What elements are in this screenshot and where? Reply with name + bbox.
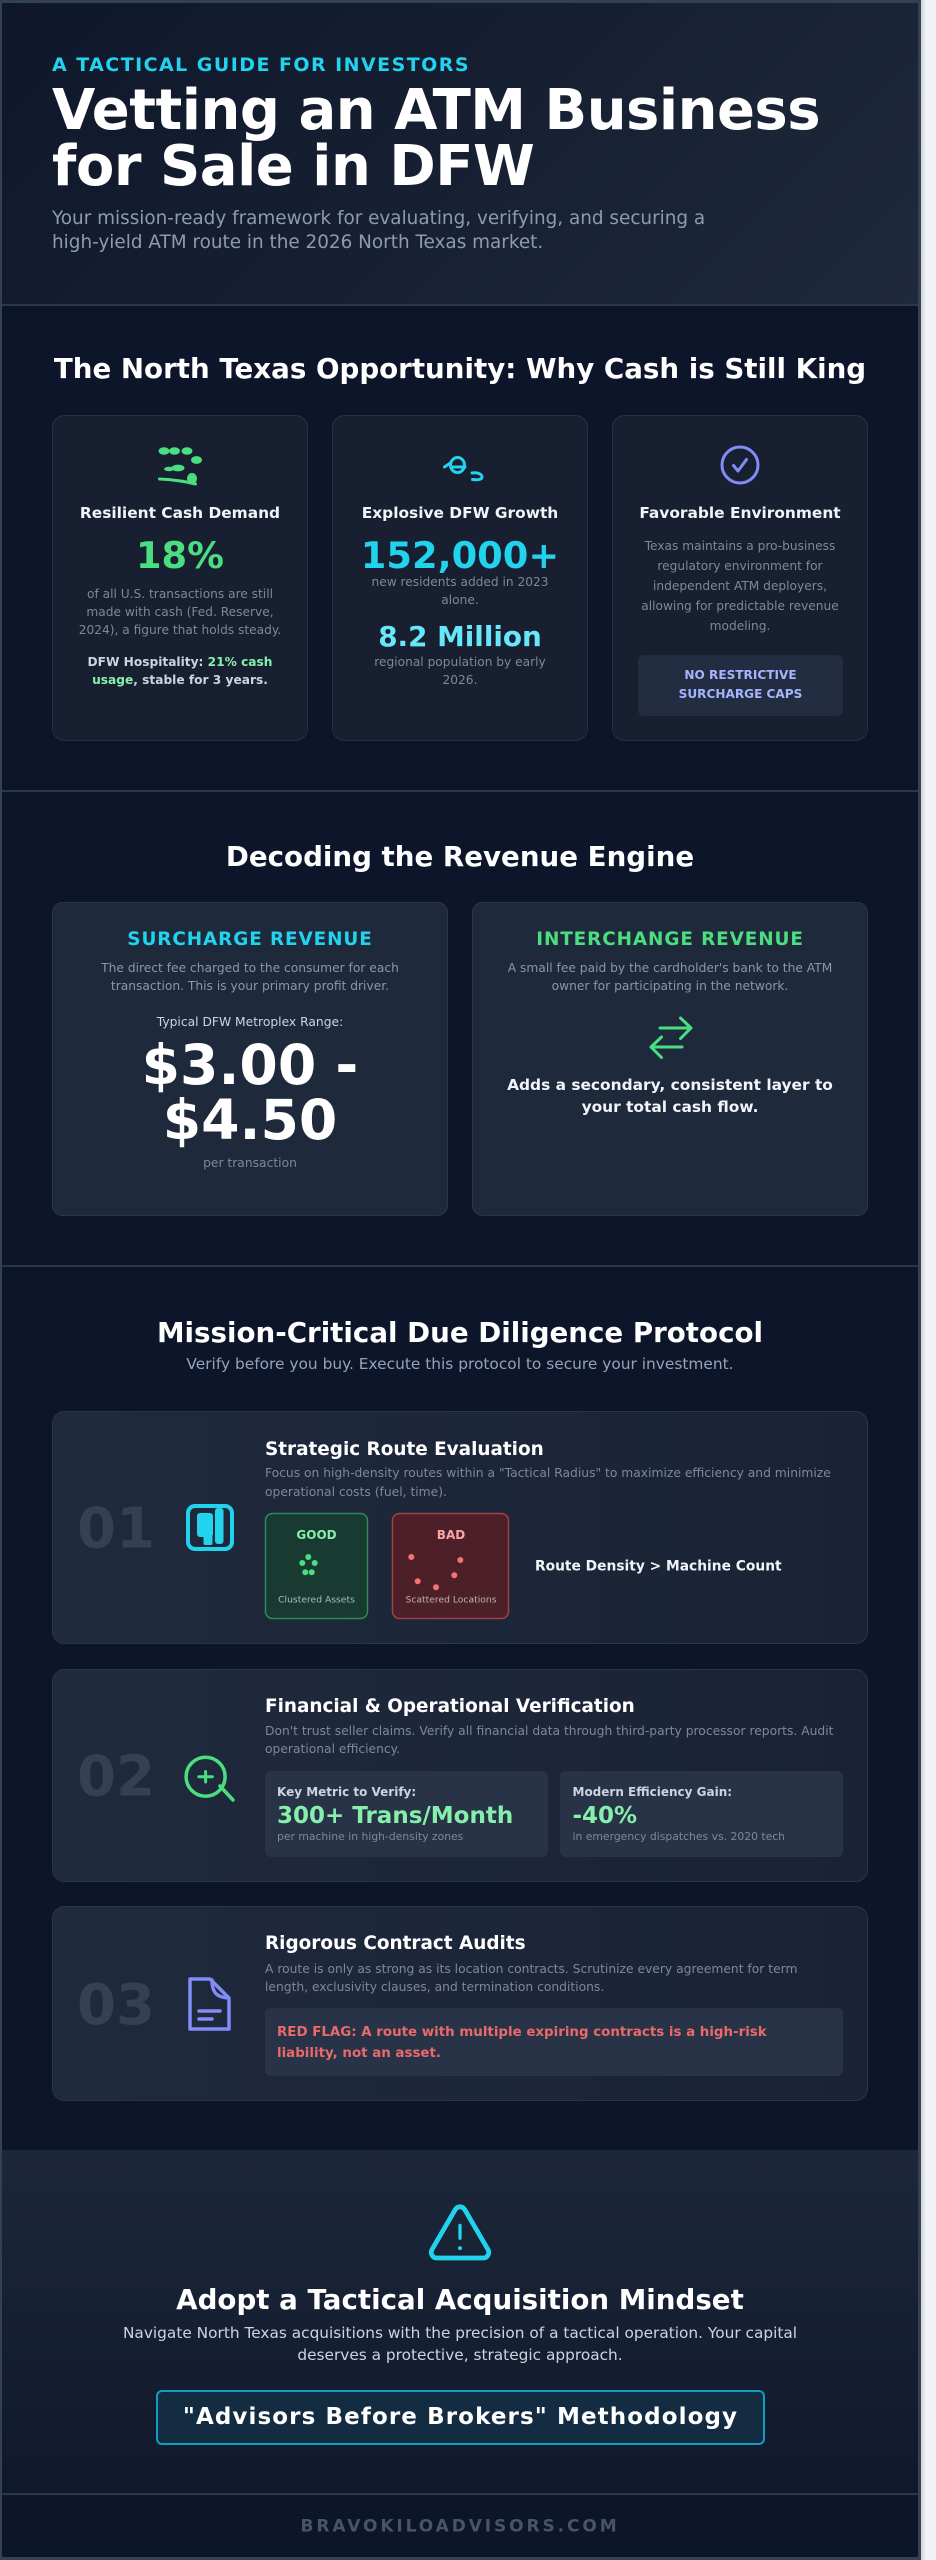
bad scattered box: BAD: [437, 1528, 465, 1542]
note: your total cash flow.: [582, 1098, 758, 1116]
card: surcharge revenue: [52, 902, 448, 1216]
description: transaction. This is your primary profit driver.: [111, 979, 389, 993]
stat: price range: $3.00 -: [142, 1034, 358, 1098]
description: A small fee paid by the cardholder's bank to the ATM: [508, 961, 832, 975]
description: [100, 961, 399, 993]
description: [641, 539, 839, 633]
hospitality note: DFW Hospitality: 21% cash: [88, 655, 272, 669]
description: 2024), a figure that holds steady.: [79, 623, 281, 637]
description: [371, 575, 549, 607]
number: 03: [77, 1973, 155, 2038]
panel: north texas opportunity: [2, 306, 918, 790]
card: explosive growth: [332, 416, 588, 740]
step 03: [52, 1906, 868, 2100]
heading: Decoding the Revenue Engine: [226, 840, 694, 873]
card title: Resilient Cash Demand: [80, 504, 280, 522]
red flag callout: liability, not an asset.: [277, 2046, 441, 2061]
description: A route is only as strong as its location contracts. Scrutinize every agreement for term: [265, 1962, 797, 1976]
efficiency box: [560, 1771, 843, 1857]
note: [507, 1076, 833, 1116]
icon: route map: [188, 1506, 232, 1549]
description: Focus on high-density routes within a "Tactical Radius" to maximize efficiency and minimize: [265, 1466, 831, 1480]
panel: call to action: [2, 2150, 918, 2494]
heading: Mission-Critical Due Diligence Protocol: [157, 1316, 763, 1349]
efficiency box: Modern Efficiency Gain:: [572, 1785, 732, 1799]
per transaction: per transaction: [203, 1156, 297, 1170]
step 01: [52, 1412, 868, 1644]
description: Texas maintains a pro-business: [644, 539, 835, 553]
panel: header: [2, 3, 918, 304]
step title: Strategic Route Evaluation: [265, 1439, 544, 1460]
route density note: Route Density > Machine Count: [535, 1559, 782, 1575]
description: owner for participating in the network.: [552, 979, 788, 993]
description: [508, 961, 832, 993]
metric box: Key Metric to Verify:: [277, 1785, 416, 1799]
heading: The North Texas Opportunity: Why Cash is Still King: [54, 352, 866, 385]
icon: exchange arrows: [651, 1018, 691, 1058]
bad scattered box: Scattered Locations: [406, 1595, 497, 1606]
metric box: 300+ Trans/Month: [277, 1803, 513, 1829]
red flag callout: [265, 2008, 843, 2076]
step 02: [52, 1670, 868, 1882]
stat: price range: $4.50: [163, 1089, 337, 1153]
number: 01: [77, 1496, 155, 1562]
efficiency box: -40%: [572, 1803, 637, 1829]
description: operational efficiency.: [265, 1742, 400, 1756]
description: length, exclusivity clauses, and termination conditions.: [265, 1980, 604, 1994]
description: alone.: [441, 593, 479, 607]
title: [52, 78, 820, 199]
icon: check circle: [722, 447, 758, 483]
description: of all U.S. transactions are still: [87, 587, 273, 601]
paragraph: Navigate North Texas acquisitions with the precision of a tactical operation. Your capital: [123, 2324, 797, 2342]
description: [265, 1724, 834, 1756]
card title: Explosive DFW Growth: [362, 504, 558, 522]
stat: 18%: 18%: [136, 534, 224, 577]
description: operational costs (fuel, time).: [265, 1485, 447, 1499]
description: new residents added in 2023: [371, 575, 549, 589]
description: modeling.: [710, 619, 770, 633]
callout: no surcharge caps: SURCHARGE CAPS: [679, 687, 802, 701]
eyebrow: A TACTICAL GUIDE FOR INVESTORS: [52, 54, 470, 76]
hospitality note: [88, 655, 272, 687]
icon: growth: [444, 458, 482, 480]
description: regional population by early: [374, 655, 546, 669]
good cluster box: [266, 1514, 368, 1618]
description: The direct fee charged to the consumer for each: [100, 961, 399, 975]
metric box: per machine in high-density zones: [277, 1830, 464, 1843]
paragraph: [123, 2324, 797, 2364]
card: favorable environment: [612, 416, 868, 740]
stat: 8.2 million: 8.2 Million: [378, 620, 542, 653]
description: made with cash (Fed. Reserve,: [86, 605, 274, 619]
note: Adds a secondary, consistent layer to: [507, 1076, 833, 1094]
footer: [2, 2495, 918, 2557]
subtitle: high-yield ATM route in the 2026 North Texas market.: [52, 232, 543, 253]
step title: Financial & Operational Verification: [265, 1696, 635, 1717]
footer: BRAVOKILOADVISORS.COM: [300, 2516, 620, 2536]
hospitality note: usage, stable for 3 years.: [92, 673, 268, 687]
icon: document: [190, 1979, 229, 2029]
methodology button: [157, 2391, 764, 2444]
panel: revenue engine: [2, 792, 918, 1266]
red flag callout: RED FLAG: A route with multiple expiring contracts is a high-risk: [277, 2025, 768, 2040]
panel: due diligence: [2, 1267, 918, 2150]
description: 2026.: [443, 673, 477, 687]
heading: Adopt a Tactical Acquisition Mindset: [176, 2283, 744, 2316]
stat: price range: [142, 1034, 358, 1153]
methodology button: "Advisors Before Brokers" Methodology: [183, 2404, 738, 2430]
description: Don't trust seller claims. Verify all financial data through third-party processor reports. Audit: [265, 1724, 834, 1738]
description: independent ATM deployers,: [653, 579, 827, 593]
subtitle: Your mission-ready framework for evaluating, verifying, and securing a: [51, 208, 705, 229]
efficiency box: in emergency dispatches vs. 2020 tech: [572, 1830, 785, 1843]
bad scattered box: [392, 1514, 508, 1618]
description: [79, 587, 281, 637]
card: interchange revenue: [472, 902, 868, 1216]
callout: no surcharge caps: [638, 655, 843, 716]
good cluster box: Clustered Assets: [278, 1595, 355, 1606]
card: resilient cash demand: [52, 416, 308, 740]
range label: Typical DFW Metroplex Range:: [156, 1015, 343, 1029]
icon: magnifier plus: [186, 1757, 233, 1800]
subheading: Verify before you buy. Execute this protocol to secure your investment.: [186, 1355, 734, 1373]
title: for Sale in DFW: [52, 134, 534, 199]
title: Vetting an ATM Business: [52, 78, 820, 143]
number: 02: [77, 1744, 155, 1810]
description: allowing for predictable revenue: [641, 599, 839, 613]
card heading: SURCHARGE REVENUE: [127, 929, 373, 950]
card title: Favorable Environment: [639, 504, 841, 522]
description: [265, 1962, 797, 1994]
step title: Rigorous Contract Audits: [265, 1933, 526, 1954]
stat: 152,000+: 152,000+: [361, 534, 559, 577]
good cluster box: GOOD: [296, 1528, 337, 1542]
icon: warning triangle: [431, 2207, 489, 2258]
description: [265, 1466, 831, 1499]
paragraph: deserves a protective, strategic approach.: [297, 2346, 623, 2364]
callout: no surcharge caps: NO RESTRICTIVE: [684, 668, 797, 682]
card heading: INTERCHANGE REVENUE: [536, 929, 804, 950]
description: [374, 655, 546, 687]
metric box: [265, 1771, 548, 1857]
description: regulatory environment for: [657, 559, 824, 573]
icon: cash: [158, 447, 202, 484]
subtitle: [51, 208, 705, 253]
